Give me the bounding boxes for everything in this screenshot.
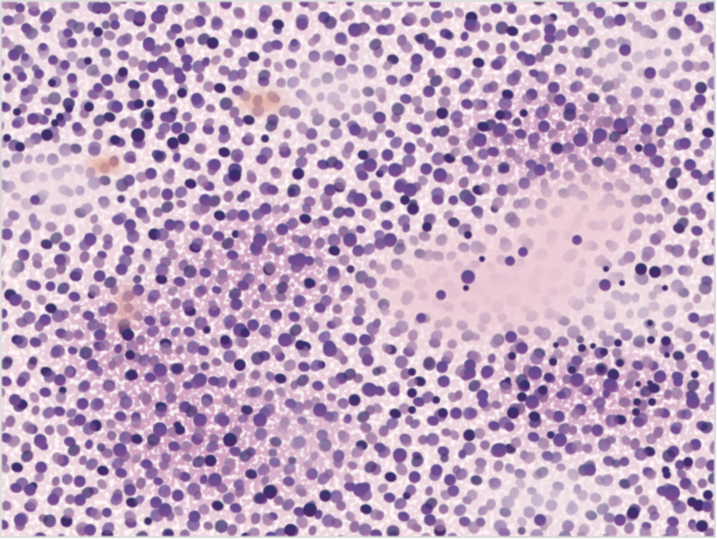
stain density patches [60,90,700,500]
eosinophilic neuron bodies [5,90,286,332]
